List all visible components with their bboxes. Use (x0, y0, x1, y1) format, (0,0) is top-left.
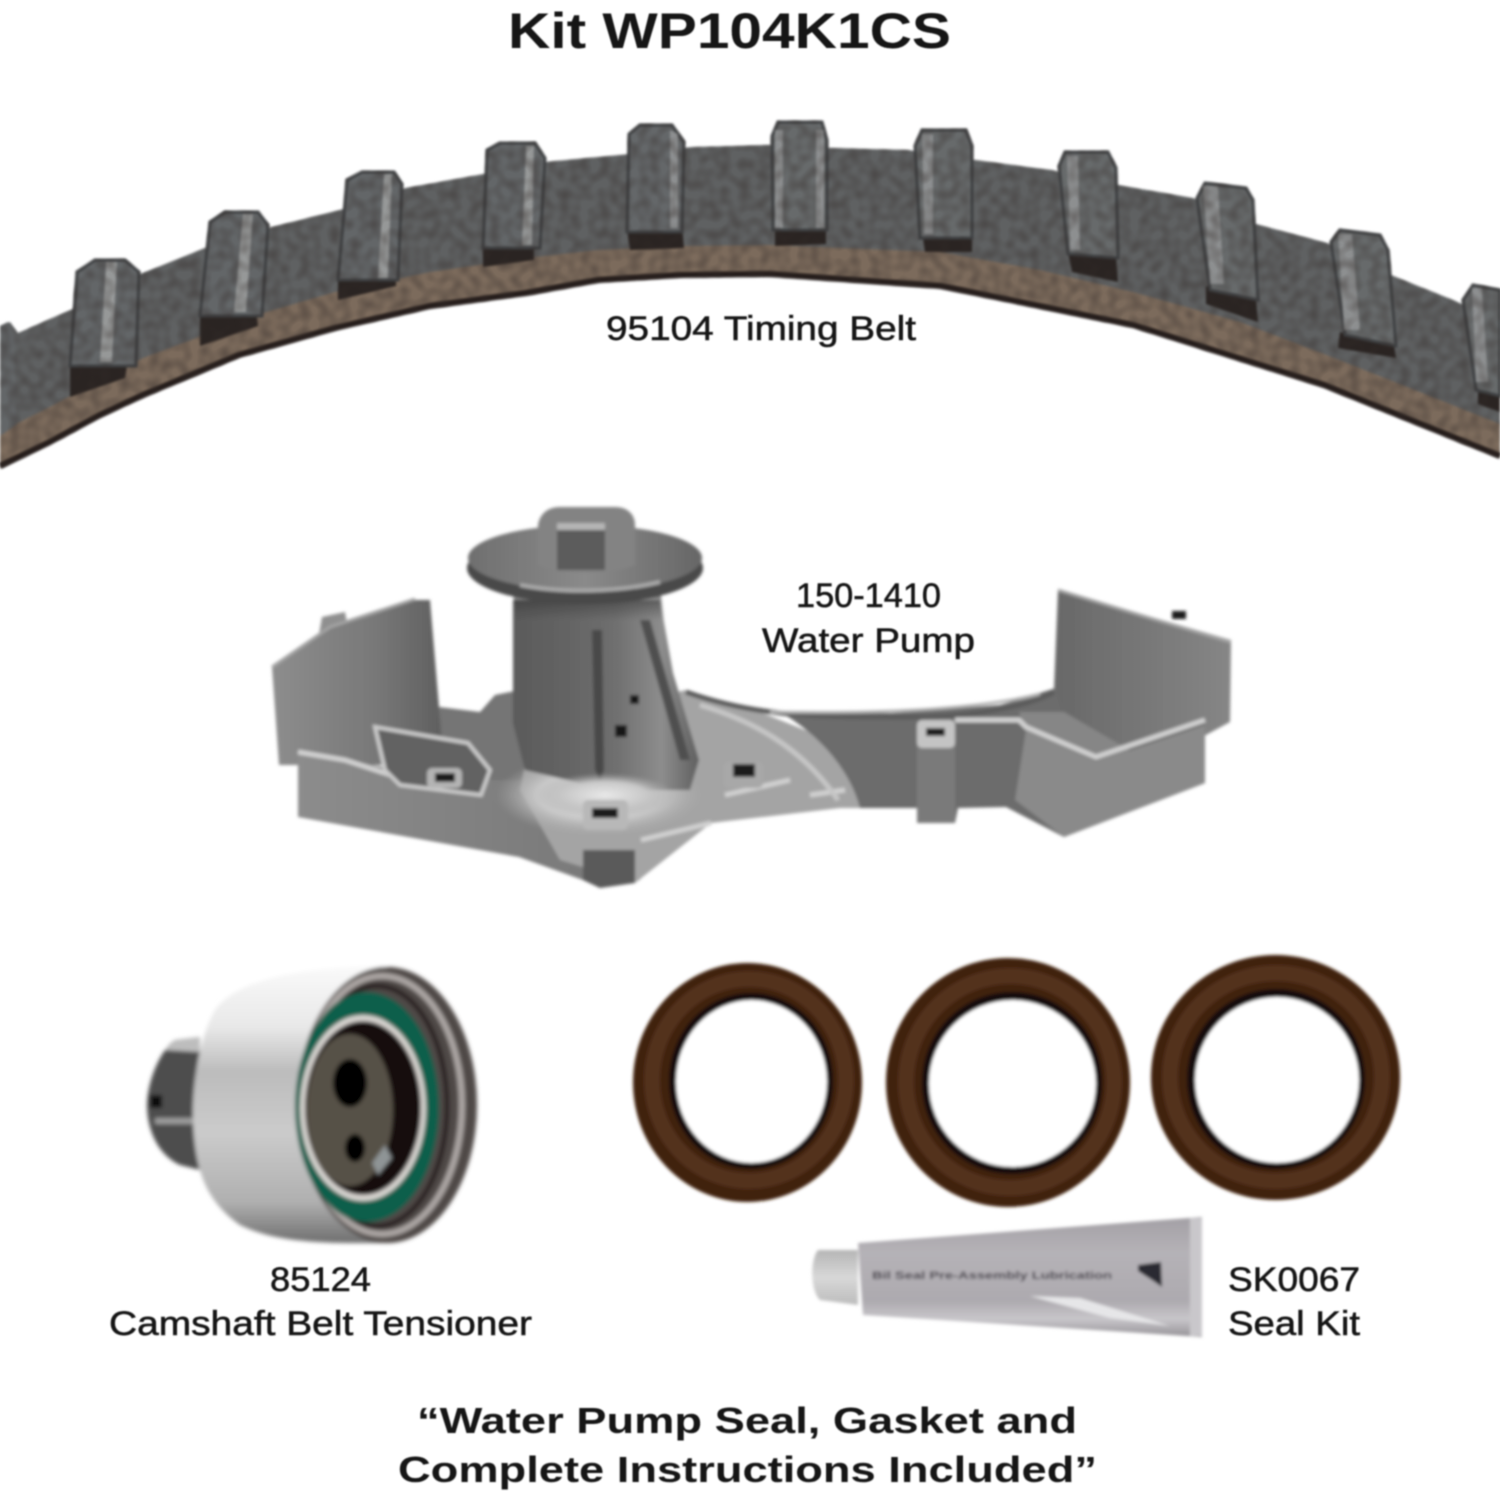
stub notch (150, 1095, 162, 1108)
stem (513, 600, 699, 790)
right bolt hole (1172, 611, 1186, 619)
seal opening (676, 1000, 827, 1163)
belt tooth 6 (772, 122, 827, 246)
belt label: 95104 Timing Belt (606, 310, 917, 348)
camshaft belt tensioner (147, 966, 477, 1243)
seal 1 (633, 963, 862, 1202)
title: Kit WP104K1CS (508, 3, 951, 59)
bright base (495, 753, 705, 837)
stem shadow (513, 590, 699, 760)
lower hole (345, 1134, 365, 1162)
seal outer (1151, 955, 1400, 1200)
left wing top edge (272, 599, 415, 667)
seal lip (1187, 989, 1365, 1169)
seal 3 (1151, 955, 1400, 1200)
belt tooth 9 (1197, 183, 1258, 322)
tube cap (812, 1250, 858, 1305)
housing rim highlight (298, 720, 1205, 840)
upper infill near stem (439, 690, 530, 780)
belt tooth 7 (915, 130, 972, 252)
seal band (1170, 973, 1382, 1181)
included note (398, 1400, 1097, 1490)
base highlight (535, 773, 675, 817)
rim shine (770, 694, 1040, 712)
roller body (193, 966, 387, 1243)
tube text: Bil Seal Pre-Assembly Lubrication (872, 1270, 1112, 1282)
housing centre and right shoulder (520, 690, 880, 883)
dark belt rim (0, 274, 1500, 466)
belt body (0, 145, 1500, 468)
shaft stub (147, 1037, 200, 1170)
hub shaft (557, 530, 605, 570)
stem holes (615, 695, 639, 737)
part name: Water Pump (762, 622, 975, 660)
belt tooth 10 (1331, 230, 1396, 358)
seal lip (669, 993, 833, 1169)
outer rim light (302, 976, 462, 1234)
mounting boss right (724, 762, 763, 788)
right wing (1054, 590, 1231, 765)
part number: SK0067 (1228, 1261, 1360, 1299)
hub glint (372, 1145, 392, 1175)
seal lip (922, 992, 1102, 1174)
seal kit label (1228, 1261, 1361, 1343)
belt tooth 1 (70, 260, 139, 397)
seal 2 (886, 958, 1130, 1207)
seal outer (886, 958, 1130, 1207)
bearing green ring (295, 992, 439, 1222)
roller face (297, 967, 477, 1243)
stub highlight (155, 1118, 197, 1124)
white ring (300, 1015, 426, 1201)
water pump label (762, 577, 975, 660)
housing right dark face (780, 688, 1205, 837)
stub upper light (165, 1037, 200, 1052)
shoulder curved rib (700, 705, 838, 800)
lower right face (1015, 725, 1205, 837)
tube crimp (1190, 1218, 1202, 1336)
tensioner label (109, 1261, 532, 1343)
housing left face (298, 752, 640, 885)
belt tooth 4 (483, 143, 545, 267)
tube logo (1138, 1262, 1162, 1287)
stem rib (592, 630, 604, 782)
belt tooth 8 (1059, 152, 1118, 282)
right wing top edge (1058, 590, 1231, 642)
rim band (686, 692, 1054, 717)
belt tooth 2 (200, 212, 268, 346)
flange front light (520, 582, 660, 591)
part number: 150-1410 (796, 577, 941, 615)
outer rim dark (307, 986, 447, 1226)
seal opening (929, 1000, 1096, 1167)
tube body (858, 1217, 1202, 1337)
gap filler under right wing (1019, 712, 1160, 768)
belt tooth 3 (338, 172, 402, 300)
left wing (272, 600, 445, 765)
hub highlight (557, 523, 605, 530)
timing belt (0, 122, 1500, 468)
brown belt edge (0, 245, 1500, 468)
belt tooth 11 (1463, 285, 1500, 412)
left inner bracket (375, 727, 490, 795)
water pump (272, 507, 1231, 888)
part name: Seal Kit (1228, 1305, 1361, 1343)
mounting post (917, 720, 955, 823)
left wing tab (318, 612, 350, 640)
belt tooth 5 (627, 125, 684, 250)
seal opening (1195, 997, 1359, 1163)
lubricant tube (812, 1217, 1202, 1337)
note line 1: “Water Pump Seal, Gasket and (417, 1400, 1077, 1441)
mounting boss left (427, 768, 462, 788)
belt tooth 0 (0, 322, 16, 436)
flange edge (467, 532, 703, 604)
stem side rib (640, 620, 690, 760)
hub (538, 507, 635, 572)
lower foot (583, 850, 635, 888)
flange face (468, 525, 702, 591)
hub centre (307, 1034, 393, 1186)
seal band (906, 976, 1114, 1188)
tube highlight (1030, 1296, 1170, 1326)
note line 2: Complete Instructions Included” (398, 1449, 1097, 1490)
seal band (652, 979, 846, 1181)
dark ring (305, 1021, 421, 1195)
part name: Camshaft Belt Tensioner (109, 1305, 532, 1343)
upper hole (333, 1059, 367, 1107)
mounting boss centre (583, 800, 628, 830)
part number: 85124 (270, 1261, 371, 1299)
seal outer (633, 963, 862, 1202)
